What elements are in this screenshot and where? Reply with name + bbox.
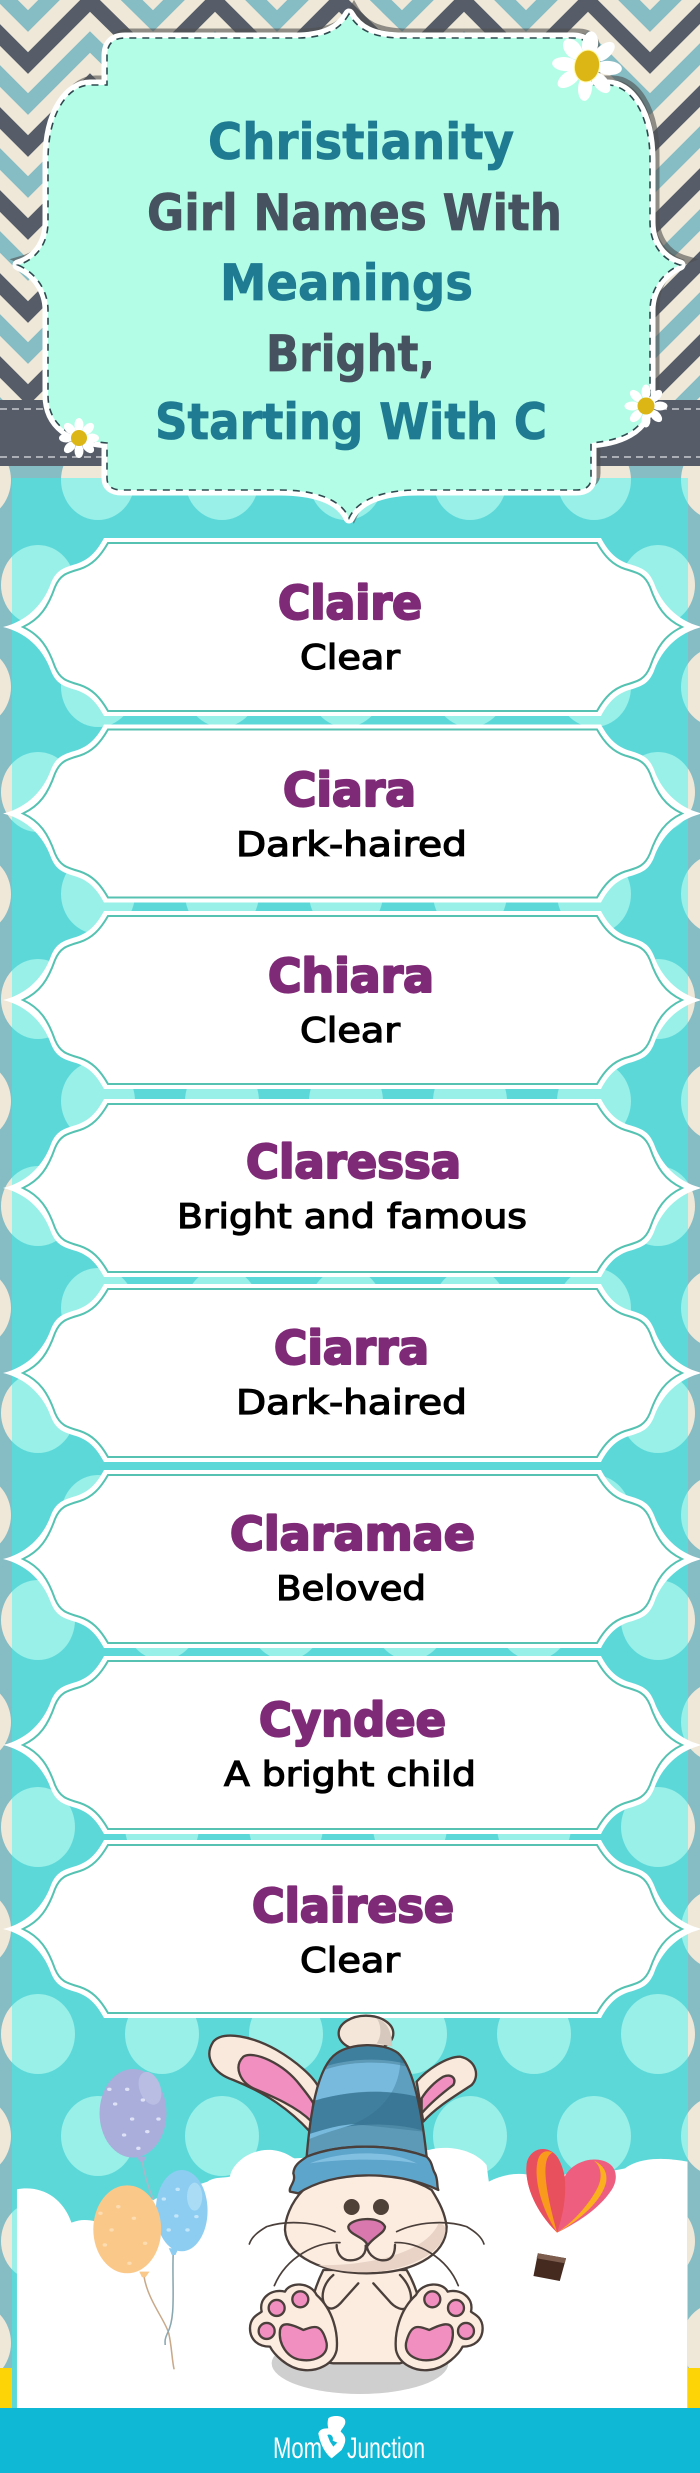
icon: mother and child bbox=[318, 2416, 345, 2458]
panel: Claire bbox=[3, 538, 700, 716]
icon: large daisy bbox=[552, 30, 622, 101]
meaning: Bright and famous: Bright and famous bbox=[177, 1197, 527, 1237]
left foot bbox=[250, 2285, 337, 2370]
title text: Girl Names With bbox=[147, 184, 562, 242]
blue balloon bbox=[156, 2170, 208, 2255]
logo: MomJunction bbox=[273, 2416, 425, 2465]
meaning: Clear: Clear bbox=[300, 1011, 400, 1051]
name: Clairese: Clairese bbox=[252, 1879, 454, 1933]
meaning: Dark-haired: Dark-haired bbox=[236, 1383, 467, 1423]
panel: Claressa bbox=[3, 1099, 700, 1277]
name: Ciara: Ciara bbox=[283, 763, 416, 817]
panel: Ciarra bbox=[3, 1284, 700, 1462]
panel: Ciara bbox=[3, 724, 700, 902]
name: Cyndee: Cyndee bbox=[259, 1693, 446, 1747]
title text bbox=[147, 113, 562, 451]
meaning: A bright child: A bright child bbox=[224, 1755, 476, 1795]
basket bbox=[533, 2253, 566, 2281]
panel: Cyndee bbox=[3, 1656, 700, 1834]
panel: Clairese bbox=[3, 1840, 700, 2018]
nose bbox=[348, 2219, 385, 2246]
head bbox=[285, 2174, 447, 2273]
yellow corner strips bbox=[0, 2368, 700, 2408]
logo wordmark Mom: Mom bbox=[273, 2432, 322, 2465]
pom-pom bbox=[339, 2016, 393, 2051]
arms bbox=[323, 2275, 411, 2309]
title text: Christianity bbox=[208, 113, 514, 171]
balloons bbox=[93, 2069, 208, 2369]
hot air balloon heart bbox=[526, 2149, 616, 2281]
title panel bbox=[18, 9, 685, 518]
right foot bbox=[396, 2285, 483, 2370]
icon: bottom right daisy bbox=[624, 384, 668, 428]
turquoise polka dot panel bbox=[12, 478, 688, 2408]
ground shadow bbox=[272, 2333, 448, 2394]
hat band bbox=[290, 2147, 438, 2193]
meaning: Dark-haired: Dark-haired bbox=[236, 825, 467, 865]
name: Claressa: Claressa bbox=[246, 1135, 461, 1189]
meaning: Clear: Clear bbox=[300, 1941, 400, 1981]
right ear bbox=[417, 2057, 476, 2122]
chevron background bbox=[0, 0, 700, 436]
logo wordmark Junction: Junction bbox=[347, 2432, 425, 2465]
body bbox=[307, 2270, 423, 2363]
name: Ciarra: Ciarra bbox=[274, 1321, 429, 1375]
bunny illustration bbox=[209, 2016, 484, 2394]
icon: bottom left daisy bbox=[59, 418, 99, 458]
purple balloon bbox=[100, 2069, 167, 2162]
whiskers bbox=[249, 2223, 484, 2286]
left ear bbox=[209, 2036, 318, 2132]
panel: Claramae bbox=[3, 1470, 700, 1648]
panel: Chiara bbox=[3, 911, 700, 1089]
dark ribbon band bbox=[0, 400, 700, 466]
meaning: Clear: Clear bbox=[300, 638, 400, 678]
panel shadow bbox=[23, 9, 685, 513]
orange balloon bbox=[93, 2185, 161, 2277]
footer bar bbox=[0, 2408, 700, 2473]
polka dot side strip background bbox=[0, 466, 700, 2408]
white clouds bbox=[17, 2148, 687, 2408]
meaning: Beloved: Beloved bbox=[276, 1569, 426, 1609]
balloon strings bbox=[142, 2159, 174, 2369]
heart envelope bbox=[526, 2149, 616, 2233]
name: Claramae: Claramae bbox=[230, 1507, 475, 1561]
panel body bbox=[18, 14, 680, 518]
hat bbox=[307, 2045, 427, 2157]
mouth bbox=[337, 2245, 395, 2260]
eyes bbox=[344, 2199, 389, 2215]
title text: Starting With C bbox=[155, 393, 547, 451]
title text: Bright, bbox=[266, 325, 435, 383]
title text: Meanings bbox=[220, 254, 473, 312]
name: Claire: Claire bbox=[278, 576, 422, 630]
name: Chiara: Chiara bbox=[268, 949, 434, 1003]
